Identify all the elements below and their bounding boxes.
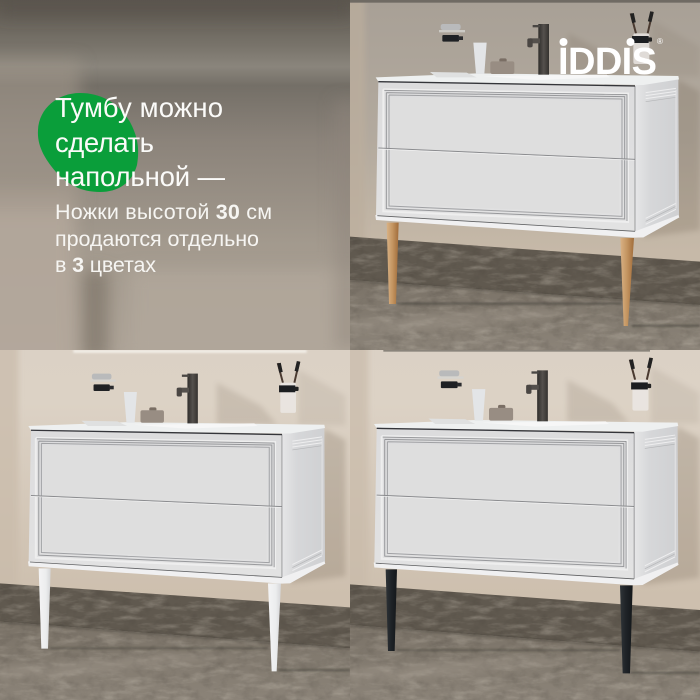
legs: wood [387,223,634,326]
subheading [55,200,272,277]
logo: IDDIS [558,41,657,83]
heading [55,92,226,192]
heading: напольной — [55,161,226,192]
subheading: Ножки высотой 30 см [55,200,272,224]
subheading: в 3 цветах [55,253,156,277]
green blob [38,93,138,192]
cabinet [374,358,699,585]
heading: сделать [55,127,154,158]
logo: ® [657,37,663,46]
panel: cabinet with white legs [0,343,350,700]
cabinet [28,361,346,584]
legs: white [39,568,281,671]
cabinet [375,12,700,238]
heading: Тумбу можно [55,92,223,123]
subheading: продаются отдельно [55,227,259,251]
legs: black [386,569,633,673]
panel: cabinet with wood legs [343,0,700,350]
panel: cabinet with black legs [343,343,700,700]
panel: text on blurred wall [0,0,370,370]
